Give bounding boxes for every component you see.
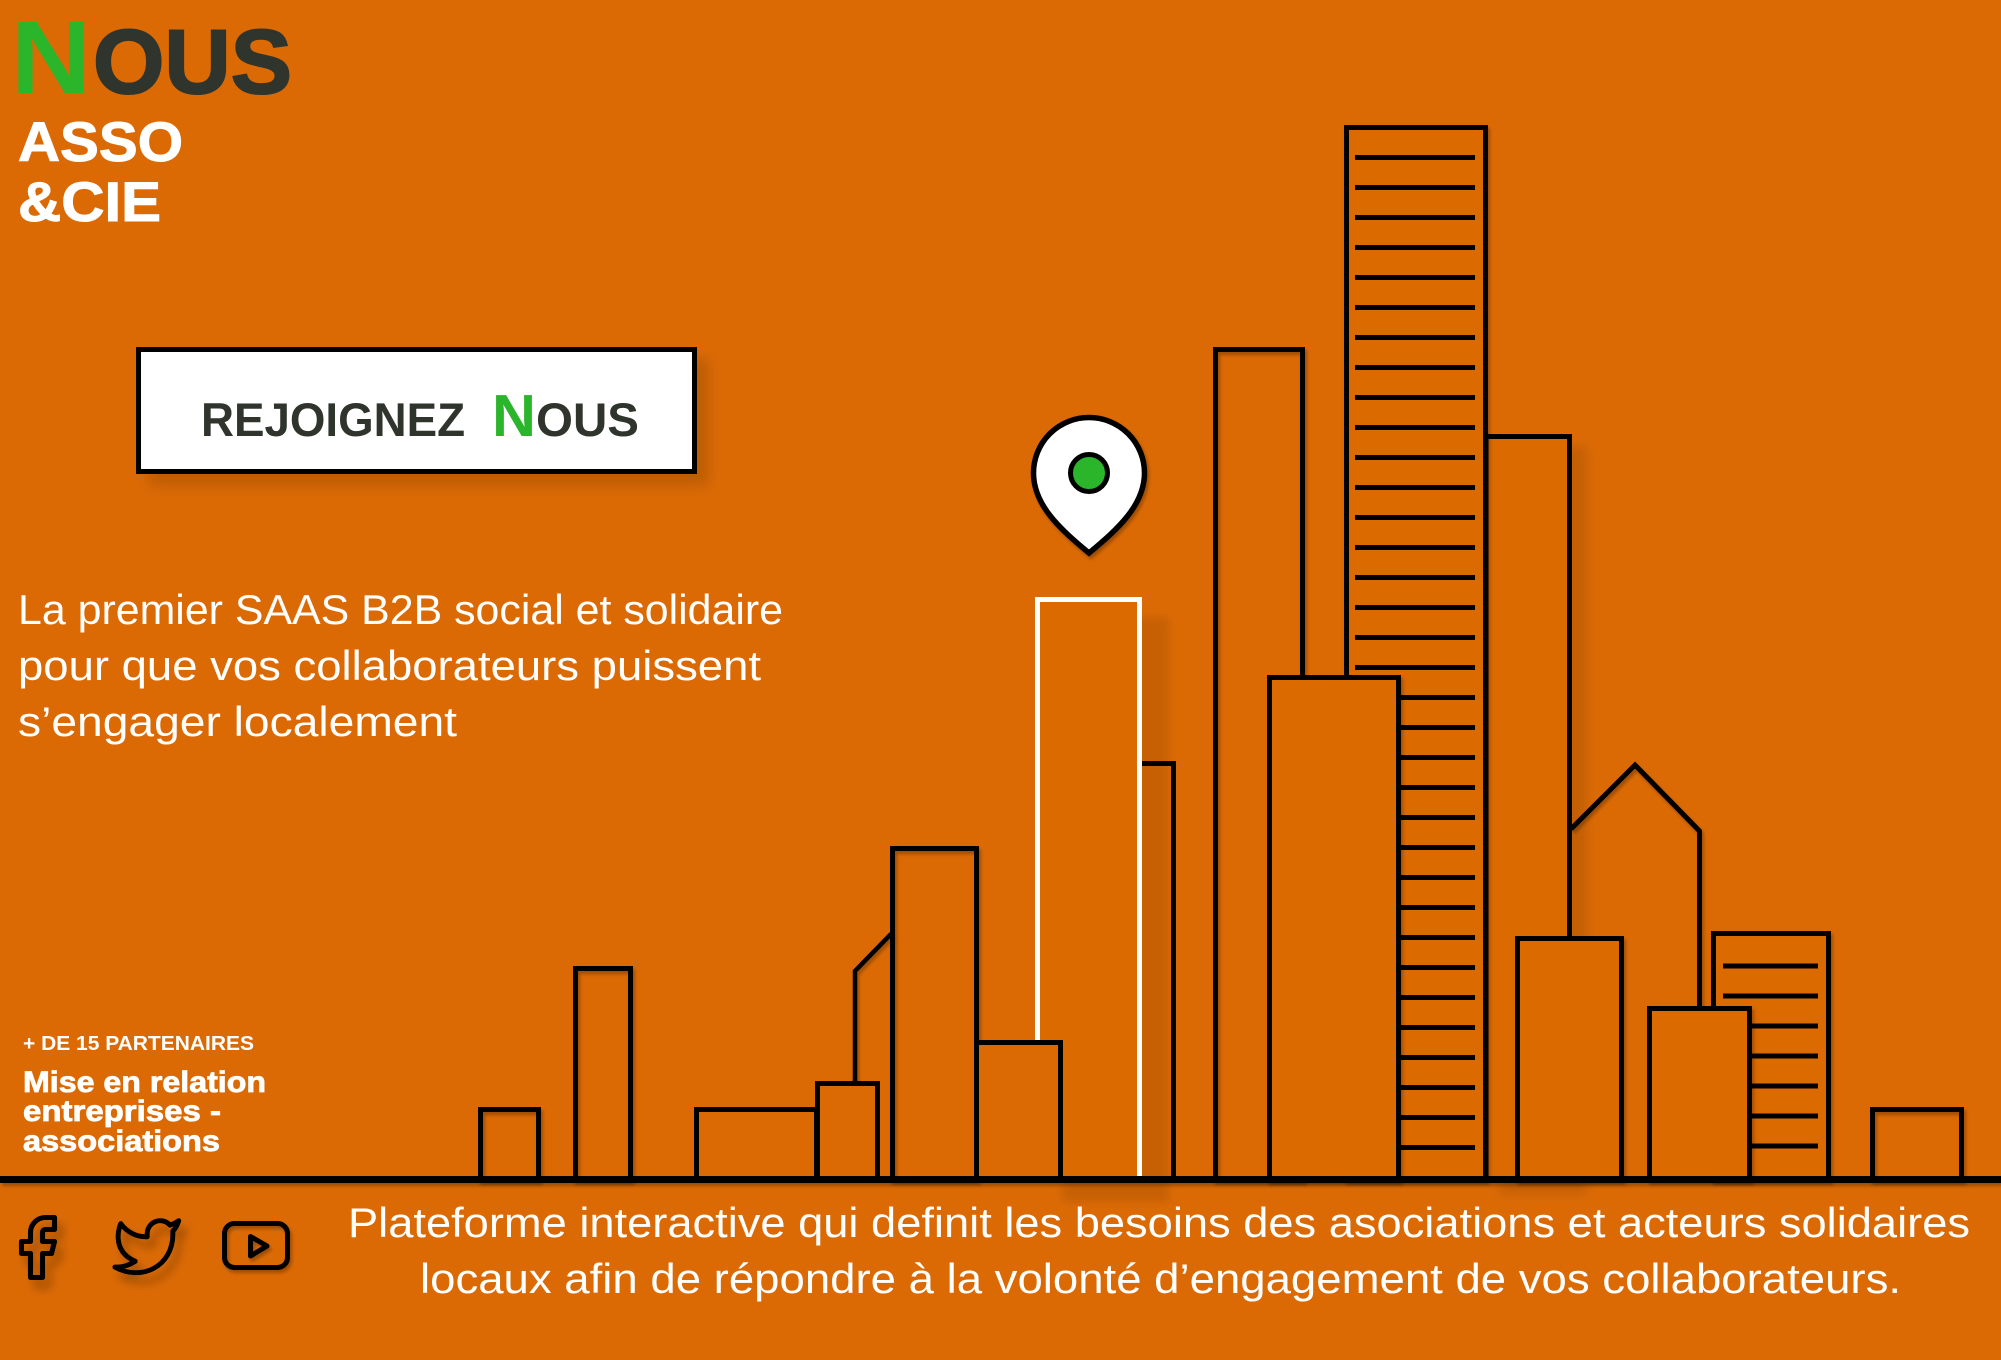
partners text: Mise en relation [23, 1066, 266, 1099]
city skyline [480, 128, 1962, 1180]
logo title [11, 0, 292, 233]
logo title: OUS [93, 12, 292, 113]
intro paragraph [18, 586, 783, 745]
intro paragraph: pour que vos collaborateurs puissent [18, 642, 761, 689]
building: small 1 [480, 1110, 538, 1180]
partners text: + DE 15 PARTENAIRES [23, 1033, 254, 1055]
button: rejoignez nous: REJOIGNEZ [201, 393, 465, 446]
building: right front [1518, 938, 1622, 1180]
footer description [348, 1199, 1970, 1302]
building: in front of white [976, 1042, 1060, 1180]
building: low square [818, 1084, 878, 1180]
partners text [23, 1033, 266, 1158]
building: striped tower [1346, 128, 1486, 1180]
building: right of tower [1486, 436, 1570, 1180]
footer description: locaux afin de répondre à la volonté d’engagement de vos collaborateurs. [420, 1255, 1901, 1302]
button: rejoignez nous [138, 350, 694, 472]
logo title: &CIE [18, 170, 161, 233]
building: narrow 2 [576, 968, 630, 1180]
building: house with pointed roof [1571, 765, 1700, 1010]
icon: twitter [115, 1221, 179, 1273]
icon: youtube [224, 1224, 288, 1268]
intro paragraph: s’engager localement [18, 698, 457, 745]
building: small front [1650, 1008, 1750, 1180]
building: front of tower [1270, 678, 1398, 1180]
partners text: entreprises - [23, 1095, 221, 1128]
building: highlighted white [1038, 600, 1140, 1180]
button: rejoignez nous: OUS [536, 393, 639, 446]
building: striped small [1714, 934, 1828, 1180]
partners text: associations [23, 1125, 220, 1158]
building: tall left of tower [1216, 350, 1302, 1180]
building: tall mid [892, 848, 976, 1180]
intro paragraph: La premier SAAS B2B social et solidaire [18, 586, 783, 633]
icon: facebook [22, 1218, 54, 1278]
ground line [0, 1176, 2001, 1183]
building: slanted roof [855, 934, 891, 1083]
icon: location pin [1034, 418, 1144, 553]
building: behind highlighted [1130, 764, 1174, 1180]
building: low wide [696, 1110, 816, 1180]
logo title: N [11, 0, 91, 115]
button: rejoignez nous: N [492, 383, 536, 449]
footer description: Plateforme interactive qui definit les besoins des asociations et acteurs solidaires [348, 1199, 1970, 1246]
logo title: ASSO [18, 110, 183, 173]
building: far right small [1872, 1110, 1962, 1180]
